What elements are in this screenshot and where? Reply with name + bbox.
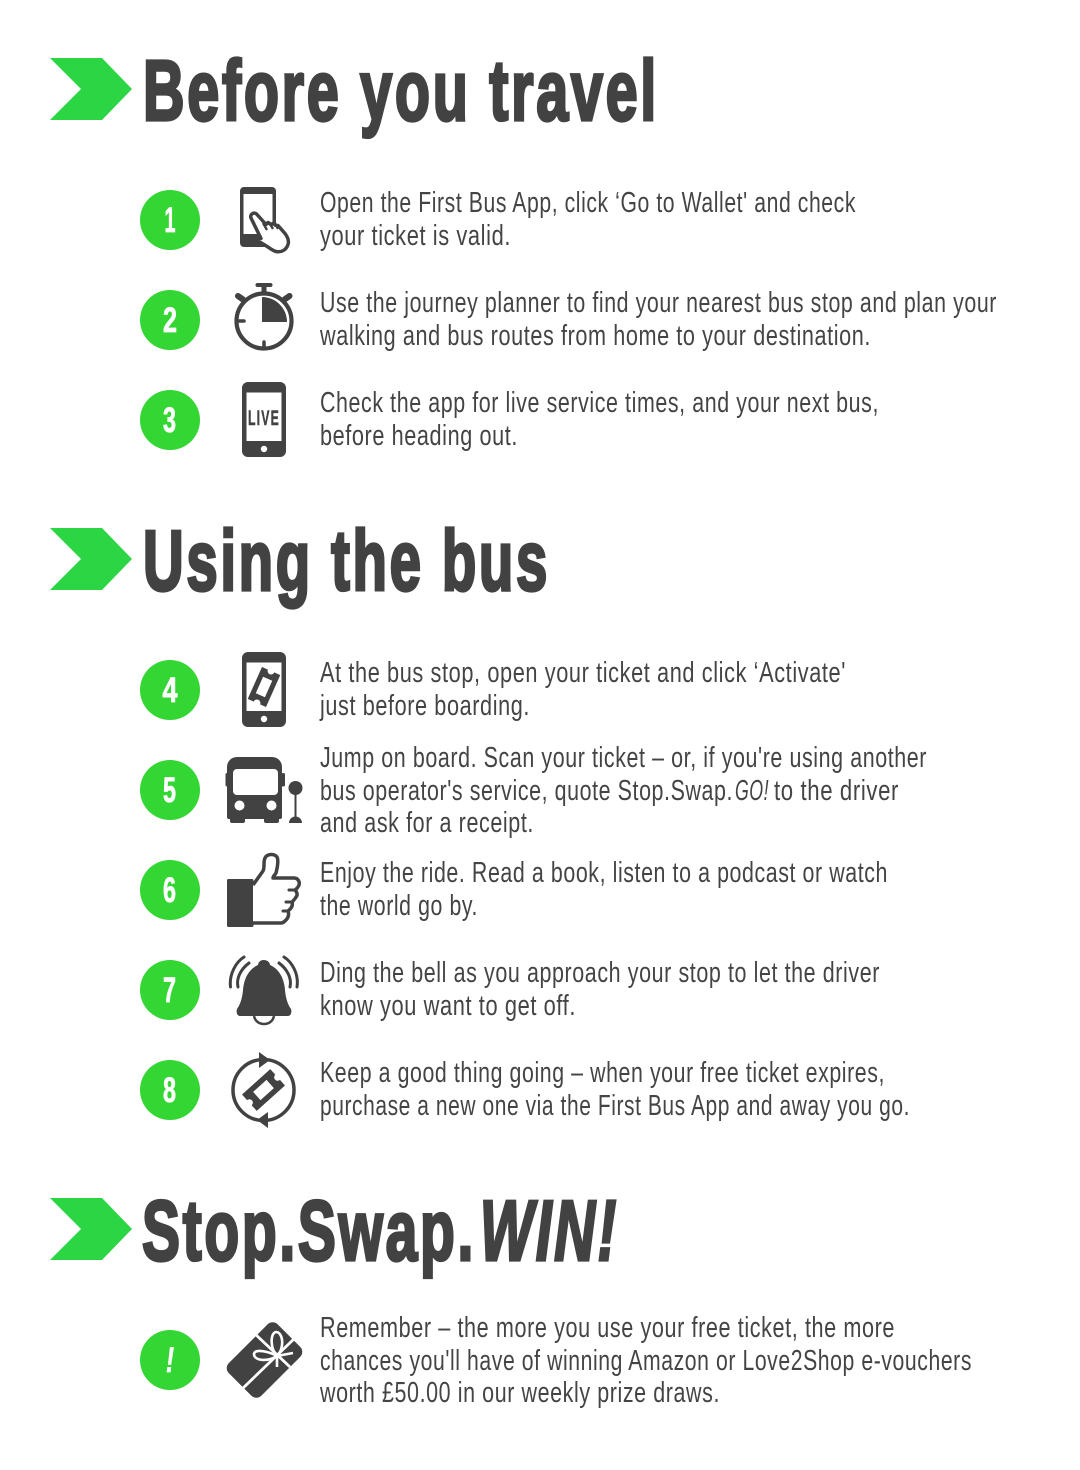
prize step: ! xyxy=(166,1341,174,1380)
icon: gift voucher xyxy=(224,1319,305,1401)
step 2 xyxy=(140,283,997,352)
heading: stop.swap.win!: Stop.Swap. xyxy=(142,1184,476,1279)
text: step 1 xyxy=(320,187,856,252)
heading: before you travel xyxy=(50,44,659,139)
text: step 8: Keep a good thing going – when your free ticket expires, xyxy=(320,1057,885,1089)
heading: before you travel: Before you travel xyxy=(143,44,659,139)
text: step 3: Check the app for live service times, and your next bus, xyxy=(320,387,879,419)
icon: phone showing live xyxy=(242,382,286,457)
heading: stop.swap.win!: WIN! xyxy=(480,1184,619,1279)
step 6 xyxy=(140,854,888,927)
text: step 7: know you want to get off. xyxy=(320,990,576,1022)
step 4 xyxy=(140,652,846,727)
icon: ringing bell xyxy=(230,957,297,1024)
text: step 5 xyxy=(320,742,927,839)
step 1 xyxy=(140,187,856,252)
step 8 xyxy=(140,1052,910,1128)
text: step 6: the world go by. xyxy=(320,890,478,922)
step 3: 3 xyxy=(163,401,176,440)
text: step 4 xyxy=(319,657,846,722)
text: step 1: your ticket is valid. xyxy=(320,220,511,252)
step 8: 8 xyxy=(163,1071,176,1110)
text: step 7 xyxy=(320,957,880,1022)
section: before you travel xyxy=(50,44,997,457)
text: step 5: GO! xyxy=(735,775,769,807)
text: prize step xyxy=(319,1312,972,1409)
text: prize step: Remember – the more you use your free ticket, the more xyxy=(320,1312,895,1344)
icon: bus at stop xyxy=(226,757,302,823)
step 5 xyxy=(140,742,927,839)
step 1: 1 xyxy=(164,201,176,240)
icon: stopwatch xyxy=(236,283,292,348)
icon: phone with ticket xyxy=(242,652,286,727)
step 6: 6 xyxy=(163,871,176,910)
section: stop swap win xyxy=(50,1184,972,1409)
text: prize step: worth £50.00 in our weekly prize draws. xyxy=(319,1377,720,1409)
step 3 xyxy=(140,382,879,457)
text: step 4: At the bus stop, open your ticket and click ‘Activate' xyxy=(320,657,846,689)
step 5: 5 xyxy=(163,771,176,810)
step 4: 4 xyxy=(162,671,178,710)
text: step 1: Open the First Bus App, click ‘Go to Wallet' and check xyxy=(320,187,856,219)
text: step 3 xyxy=(320,387,879,452)
text: step 6 xyxy=(320,857,888,922)
text: step 6: Enjoy the ride. Read a book, listen to a podcast or watch xyxy=(320,857,888,889)
text: step 5: bus operator's service, quote Stop.Swap. xyxy=(320,775,733,807)
text: step 3: before heading out. xyxy=(320,420,518,452)
text: step 7: Ding the bell as you approach your stop to let the driver xyxy=(320,957,880,989)
step 2: 2 xyxy=(163,301,177,340)
heading: using the bus: Using the bus xyxy=(143,514,550,609)
text: step 5: and ask for a receipt. xyxy=(320,807,534,839)
icon: thumbs up xyxy=(227,854,299,927)
step 7 xyxy=(140,957,880,1024)
icon: ticket renewal cycle xyxy=(233,1052,294,1128)
heading: using the bus xyxy=(50,514,550,609)
text: step 2 xyxy=(319,287,997,352)
step 7: 7 xyxy=(163,971,176,1010)
text: step 4: just before boarding. xyxy=(319,690,530,722)
text: step 8 xyxy=(320,1057,910,1122)
prize step xyxy=(140,1312,972,1409)
icon: phone with tapping hand xyxy=(240,187,288,252)
text: step 2: walking and bus routes from home to your destination. xyxy=(319,320,871,352)
icon: phone showing live: LIVE xyxy=(248,407,280,430)
section: using the bus xyxy=(50,514,927,1128)
text: step 5: to the driver xyxy=(774,775,899,807)
